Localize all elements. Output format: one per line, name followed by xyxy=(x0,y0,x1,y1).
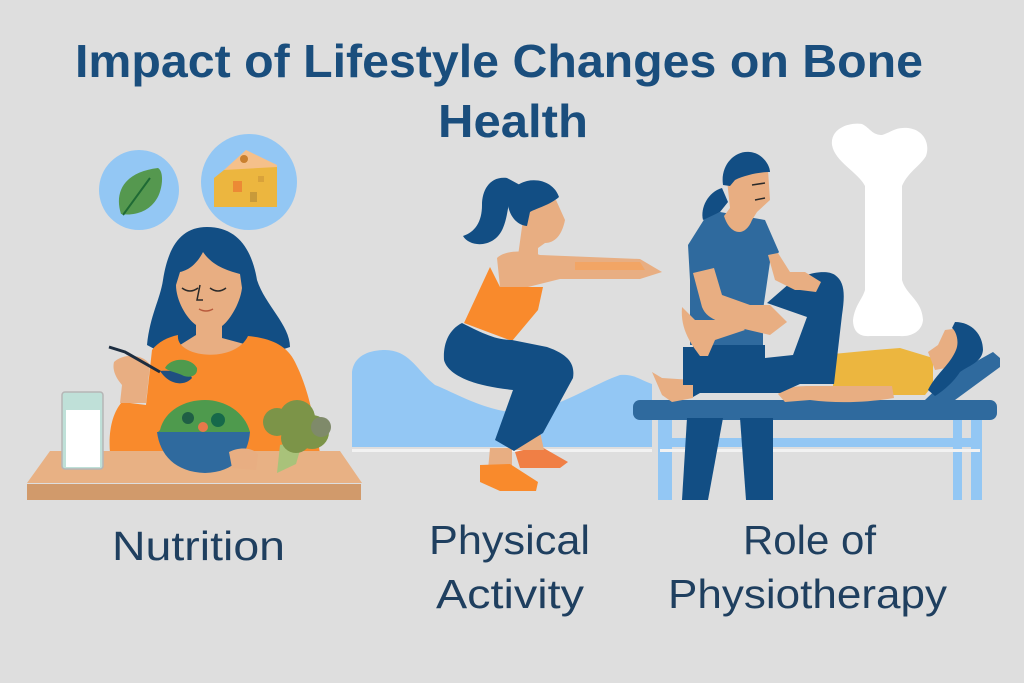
label: role of physiotherapy: Role of xyxy=(743,517,877,563)
sweater xyxy=(110,335,320,453)
hair xyxy=(723,152,770,186)
label: nutrition: Nutrition xyxy=(112,523,285,569)
foot xyxy=(652,372,693,402)
table xyxy=(27,451,362,500)
label: role of physiotherapy: Physiotherapy xyxy=(668,571,948,617)
icon: leaf bubble xyxy=(99,150,179,230)
therapist legs xyxy=(682,418,773,500)
label: physical activity xyxy=(429,517,590,617)
arm xyxy=(497,252,662,287)
shirt xyxy=(688,212,779,345)
head xyxy=(928,328,962,370)
far arm and hand xyxy=(768,253,821,292)
hair xyxy=(147,227,290,352)
icon: cheese bubble xyxy=(201,134,297,230)
back shoe xyxy=(515,446,568,468)
figure: woman squatting xyxy=(444,178,662,491)
figure: woman eating xyxy=(109,227,320,453)
torso xyxy=(833,348,933,395)
arm xyxy=(778,386,894,402)
panel: physical activity xyxy=(352,178,662,617)
near arm xyxy=(693,268,787,335)
title xyxy=(75,35,923,147)
icon: bone xyxy=(832,124,927,336)
glass of milk xyxy=(62,392,103,469)
headrest xyxy=(925,352,1000,400)
hand and spoon xyxy=(113,356,150,403)
therapist xyxy=(682,152,821,385)
label: physical activity: Physical xyxy=(429,517,590,563)
patient raised foot xyxy=(682,307,745,356)
ponytail xyxy=(463,178,520,244)
trousers xyxy=(444,323,573,451)
tank top xyxy=(464,267,543,341)
panel: nutrition xyxy=(27,134,362,569)
background hills xyxy=(352,350,652,452)
face and neck xyxy=(176,252,248,358)
label: physical activity: Activity xyxy=(436,571,585,617)
head xyxy=(518,200,565,256)
title: Health xyxy=(438,95,588,147)
salad bowl xyxy=(157,400,258,473)
broccoli xyxy=(263,400,331,473)
panel: role of physiotherapy xyxy=(633,124,1000,617)
treatment table xyxy=(633,400,997,500)
patient xyxy=(652,272,1000,402)
neck and face xyxy=(724,170,770,232)
trousers hip xyxy=(683,347,765,385)
front shoe xyxy=(488,448,512,470)
legs xyxy=(693,272,844,397)
label: role of physiotherapy xyxy=(668,517,948,617)
title: Impact of Lifestyle Changes on Bone xyxy=(75,35,923,87)
